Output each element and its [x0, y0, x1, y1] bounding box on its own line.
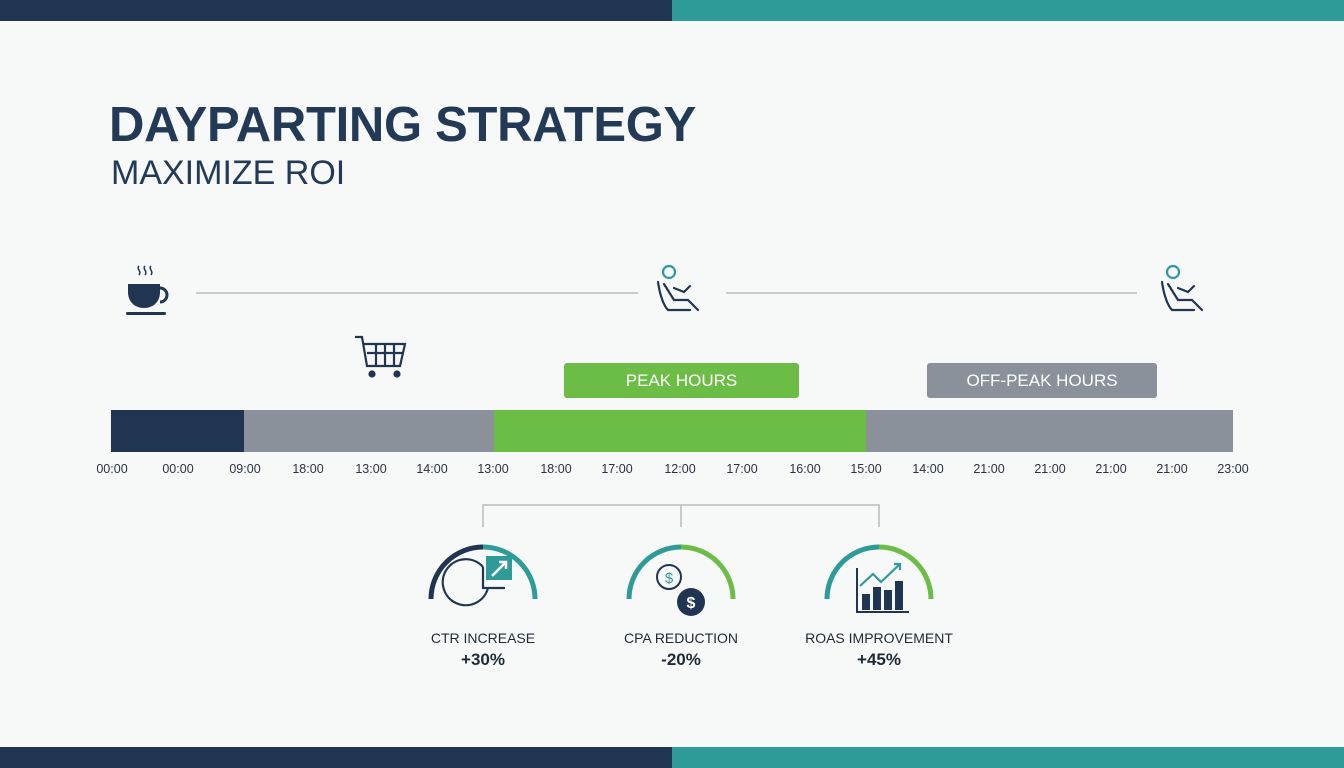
timeline labels: 16:00 [789, 462, 821, 476]
gauge: CTR [431, 547, 535, 605]
gauge: ROAS [827, 547, 931, 612]
timeline labels: 14:00 [416, 462, 448, 476]
timeline labels: 15:00 [850, 462, 882, 476]
timeline labels: 18:00 [292, 462, 324, 476]
peak hours label [564, 363, 799, 398]
timeline labels: 13:00 [355, 462, 387, 476]
metric: ROAS: ROAS IMPROVEMENT [805, 630, 953, 646]
timeline labels: 14:00 [912, 462, 944, 476]
metric: CPA: CPA REDUCTION [624, 630, 738, 646]
top bar [0, 0, 1344, 21]
timeline labels: 23:00 [1217, 462, 1249, 476]
timeline labels: 13:00 [477, 462, 509, 476]
timeline labels: 00:00 [162, 462, 194, 476]
title: DAYPARTING STRATEGY [109, 98, 696, 152]
timeline labels: 21:00 [1156, 462, 1188, 476]
timeline labels [96, 462, 1249, 476]
gauge: CPA: $ [665, 570, 674, 587]
metric: CTR: +30% [461, 650, 505, 669]
metric: ROAS: +45% [857, 650, 901, 669]
peak hours label: PEAK HOURS [626, 371, 737, 390]
timeline labels: 21:00 [1034, 462, 1066, 476]
icons and lines row [126, 264, 1204, 378]
metric: CPA [624, 630, 738, 669]
icon: shopping cart [355, 337, 405, 376]
timeline labels: 00:00 [96, 462, 128, 476]
timeline labels: 17:00 [726, 462, 758, 476]
bottom bar [0, 747, 1344, 768]
gauge: CPA [629, 547, 733, 616]
metric: CTR [431, 630, 535, 669]
metric: CPA: -20% [661, 650, 701, 669]
timeline labels: 21:00 [1095, 462, 1127, 476]
icon: person relaxing [658, 266, 698, 310]
connector and gauges [428, 504, 934, 616]
timeline labels: 21:00 [973, 462, 1005, 476]
timeline labels: 09:00 [229, 462, 261, 476]
icon: coffee cup [126, 266, 167, 315]
timeline labels: 17:00 [601, 462, 633, 476]
timeline labels: 18:00 [540, 462, 572, 476]
timeline bar [111, 410, 1233, 452]
off-peak hours label: OFF-PEAK HOURS [966, 371, 1118, 390]
metric: ROAS [805, 630, 953, 669]
timeline labels: 12:00 [664, 462, 696, 476]
metric: CTR: CTR INCREASE [431, 630, 535, 646]
gauge: CPA: $ [687, 595, 696, 612]
off-peak hours label [927, 363, 1157, 398]
subtitle: MAXIMIZE ROI [111, 154, 345, 192]
